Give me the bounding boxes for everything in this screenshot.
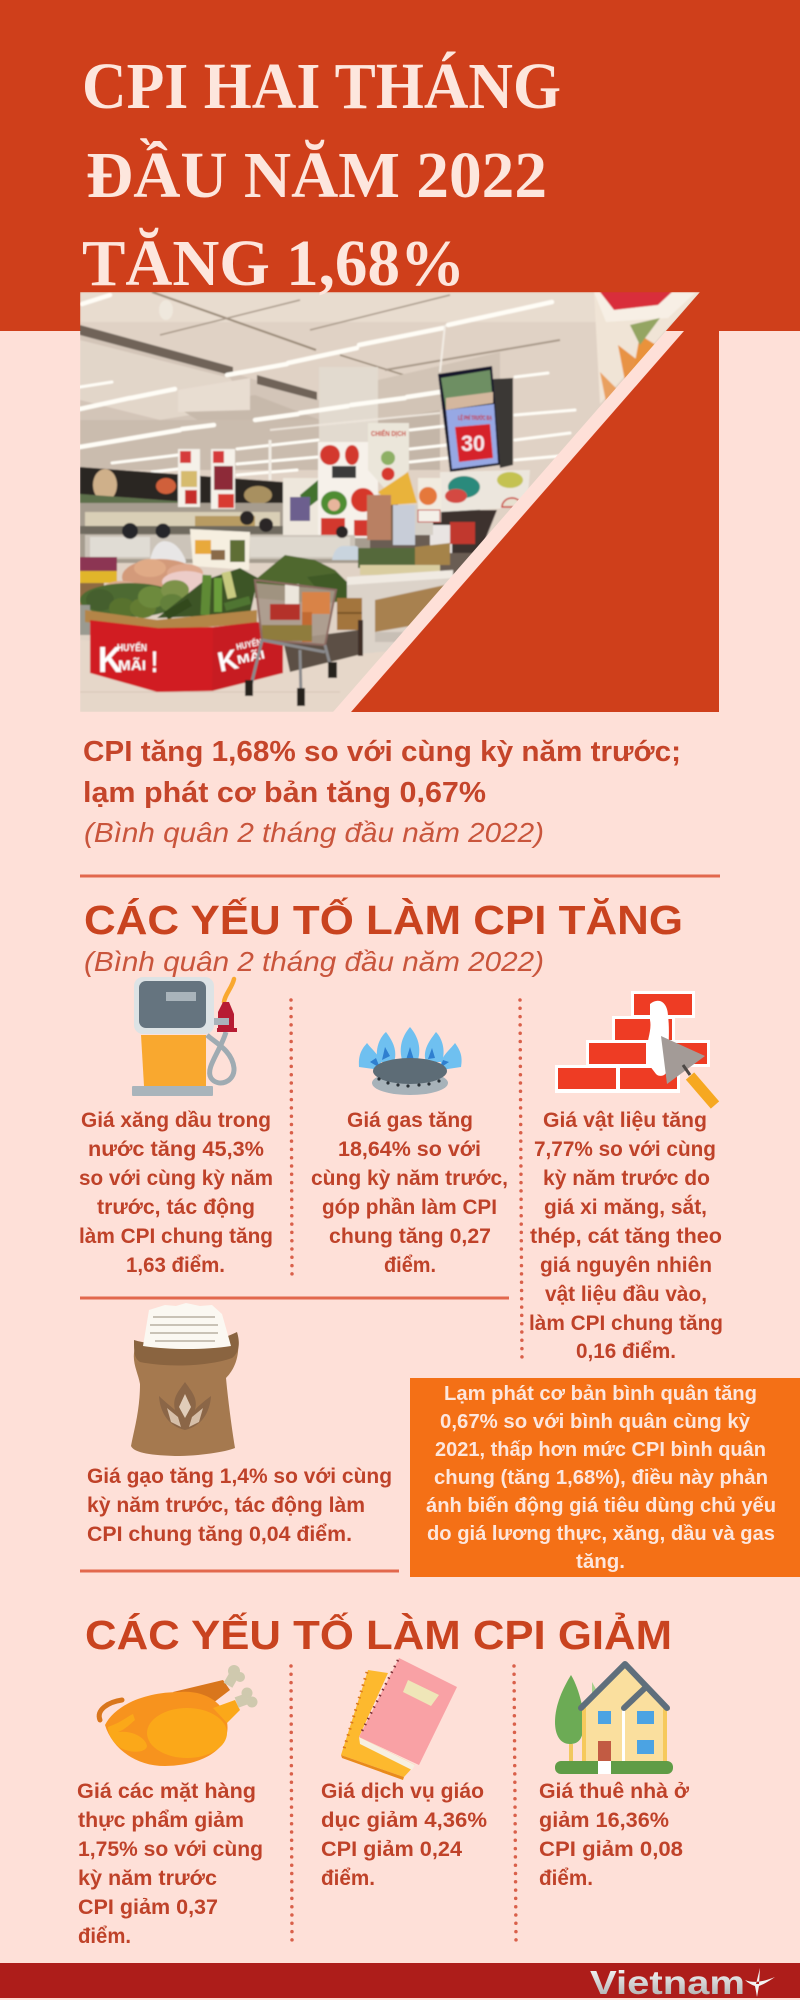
- supermarket photo: 30: [461, 431, 485, 456]
- text: fuel: làm CPI chung tăng: [79, 1225, 273, 1248]
- text: education: Giá dịch vụ giáo: [321, 1780, 484, 1803]
- text: materials: Giá vật liệu tăng: [543, 1109, 707, 1132]
- text: fuel: so với cùng kỳ năm: [79, 1167, 273, 1190]
- callout: core inflation: chung (tăng 1,68%), điều này phản: [434, 1466, 768, 1489]
- title: TĂNG 1,68%: [82, 227, 465, 300]
- text: food: 1,75% so với cùng: [78, 1838, 263, 1861]
- text: education: CPI giảm 0,24: [321, 1838, 462, 1861]
- large hanging signs: [178, 449, 200, 507]
- callout: core inflation: tăng.: [576, 1550, 625, 1573]
- icon: gas burner: [359, 1027, 462, 1095]
- text: food: [77, 1780, 263, 1948]
- callout: core inflation: do giá lương thực, xăng, dầu và gas: [427, 1522, 775, 1545]
- melons: [80, 583, 180, 617]
- icon: watermelon sign: [448, 476, 480, 498]
- text: materials: 7,77% so với cùng: [534, 1138, 716, 1161]
- icon: fuel pump: [132, 977, 237, 1096]
- wooden crate: [337, 598, 362, 630]
- text: housing: điểm.: [539, 1867, 593, 1890]
- text: materials: [529, 1109, 723, 1363]
- text: gas: Giá gas tăng: [347, 1109, 473, 1132]
- text: materials: giá nguyên nhiên: [540, 1254, 712, 1277]
- back shelves: [80, 503, 370, 563]
- text: food: Giá các mặt hàng: [77, 1780, 256, 1803]
- lede text: CPI tăng 1,68% so với cùng kỳ năm trước;: [83, 736, 681, 768]
- text: rice: Giá gạo tăng 1,4% so với cùng: [87, 1465, 392, 1488]
- heading: factors decreasing CPI: CÁC YẾU TỐ LÀM CPI GIẢM: [85, 1612, 672, 1658]
- title: [82, 50, 561, 300]
- header band: [0, 0, 800, 331]
- white band with fruit signs: [440, 470, 530, 512]
- digital screen: [438, 366, 500, 472]
- red panel behind photo: [351, 331, 719, 712]
- text: materials: vật liệu đầu vào,: [545, 1283, 707, 1306]
- right counter: [346, 584, 364, 600]
- supermarket photo: HUYẾN: [117, 641, 147, 654]
- shopping cart: [245, 580, 337, 706]
- carrot banner: [596, 296, 693, 403]
- text: food: điểm.: [78, 1925, 131, 1948]
- callout: core inflation: [410, 1378, 800, 1577]
- supermarket photo: CHIẾN DỊCH: [371, 428, 406, 438]
- text: rice: CPI chung tăng 0,04 điểm.: [87, 1523, 352, 1546]
- red promo block: [89, 620, 214, 693]
- text: education: điểm.: [321, 1867, 375, 1890]
- callout: core inflation: 0,67% so với bình quân cùng kỳ: [440, 1410, 751, 1433]
- text: materials: giá xi măng, sắt,: [544, 1195, 707, 1219]
- text: fuel: trước, tác động: [97, 1196, 255, 1219]
- heading: factors increasing CPI: [84, 897, 683, 977]
- ceiling: [80, 321, 674, 652]
- text: education: dục giảm 4,36%: [321, 1809, 487, 1832]
- text: materials: làm CPI chung tăng: [529, 1312, 723, 1335]
- supermarket photo: MÃI: [118, 656, 146, 673]
- supermarket photo: HUYẾN: [235, 637, 263, 652]
- footer band with logo: [0, 1963, 800, 2000]
- text: materials: thép, cát tăng theo: [530, 1225, 722, 1248]
- text: gas: điểm.: [384, 1254, 436, 1277]
- price cards: [190, 529, 250, 570]
- supermarket photo: LỆ PHÍ TRƯỚC BẠ: [458, 414, 492, 422]
- floor: [364, 652, 385, 656]
- text: fuel: Giá xăng dầu trong: [81, 1109, 271, 1132]
- text: fuel: nước tăng 45,3%: [88, 1138, 264, 1161]
- icon: notebooks: [341, 1658, 457, 1780]
- text: gas: [311, 1109, 508, 1277]
- text: food: kỳ năm trước: [78, 1867, 217, 1890]
- text: housing: [539, 1780, 689, 1890]
- footer band with logo: Vietnam: [590, 1964, 745, 2000]
- left fruits: [80, 557, 117, 571]
- text: materials: kỳ năm trước do: [543, 1167, 710, 1190]
- heading: factors increasing CPI: CÁC YẾU TỐ LÀM CPI TĂNG: [84, 897, 683, 943]
- shoppers and back counters: [85, 535, 355, 559]
- text: food: thực phẩm giảm: [78, 1809, 244, 1832]
- heading: factors increasing CPI: (Bình quân 2 tháng đầu năm 2022): [84, 946, 544, 977]
- store back signage band: [80, 466, 284, 504]
- wood rim: [85, 610, 257, 631]
- callout: core inflation: 2021, thấp hơn mức CPI bình quân: [435, 1438, 766, 1461]
- lede text: (Bình quân 2 tháng đầu năm 2022): [84, 817, 544, 848]
- title: ĐẦU NĂM 2022: [86, 138, 547, 212]
- lede text: [83, 736, 681, 848]
- text: gas: chung tăng 0,27: [329, 1225, 491, 1248]
- text: gas: cùng kỳ năm trước,: [311, 1167, 508, 1190]
- text: rice: [87, 1465, 392, 1546]
- icon: roast chicken: [99, 1665, 258, 1766]
- greens behind cart: [254, 554, 347, 603]
- text: fuel: 1,63 điểm.: [126, 1254, 225, 1277]
- title: CPI HAI THÁNG: [82, 50, 561, 123]
- supermarket photo: K: [215, 643, 241, 678]
- text: housing: giảm 16,36%: [539, 1809, 669, 1832]
- callout: core inflation: ánh biến động giá tiêu dùng chủ yếu: [426, 1494, 776, 1517]
- text: fuel: [79, 1109, 273, 1277]
- text: housing: CPI giảm 0,08: [539, 1838, 683, 1861]
- text: materials: 0,16 điểm.: [576, 1340, 676, 1363]
- lede text: lạm phát cơ bản tăng 0,67%: [83, 777, 486, 809]
- supermarket photo: [80, 292, 700, 712]
- supermarket photo: K: [98, 639, 122, 680]
- right produce: [357, 547, 415, 569]
- cucumbers: [157, 568, 258, 618]
- callout: core inflation: Lạm phát cơ bản bình quân tăng: [444, 1382, 757, 1405]
- supermarket photo: !: [151, 646, 158, 679]
- icon: rice sack: [131, 1303, 239, 1456]
- supermarket photo: MÃI: [236, 646, 266, 667]
- roots and gourds: [122, 558, 186, 588]
- text: education: [321, 1780, 487, 1890]
- text: food: CPI giảm 0,37: [78, 1896, 218, 1919]
- icon: house: [555, 1664, 673, 1774]
- text: gas: 18,64% so với: [338, 1138, 481, 1161]
- text: housing: Giá thuê nhà ở: [539, 1780, 689, 1803]
- text: gas: góp phần làm CPI: [322, 1196, 497, 1219]
- icon: bricks and trowel: [555, 991, 715, 1105]
- second dark screen: [492, 378, 513, 468]
- text: rice: kỳ năm trước, tác động làm: [87, 1494, 365, 1517]
